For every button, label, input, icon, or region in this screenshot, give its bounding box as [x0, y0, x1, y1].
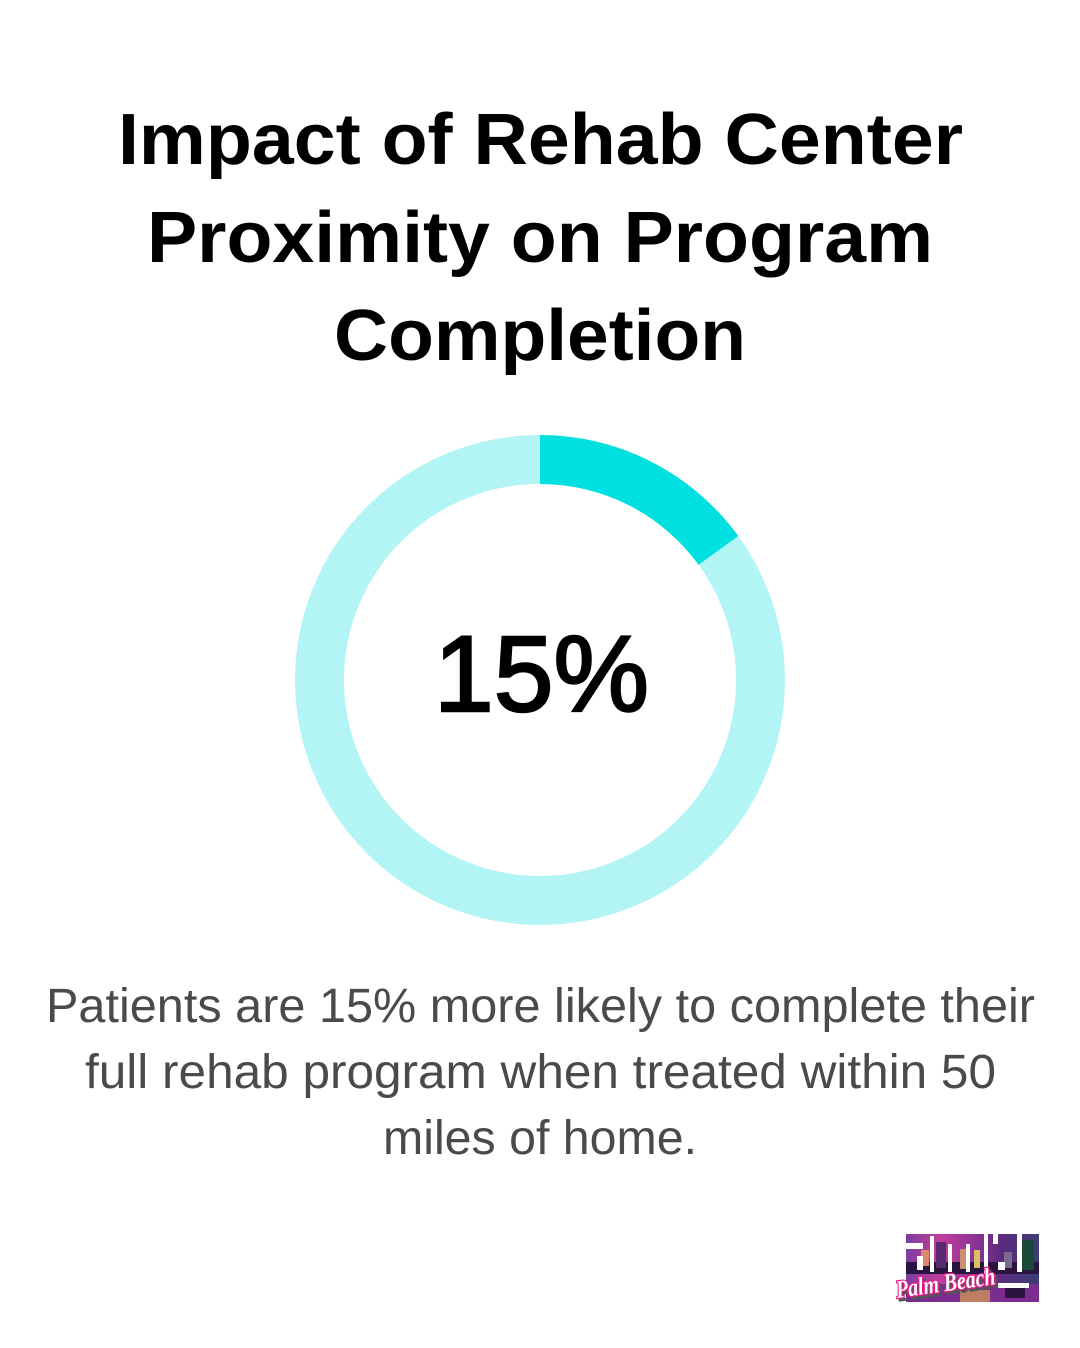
title: Completion [334, 296, 746, 376]
donut highlighted segment [540, 435, 738, 565]
logo script text: Palm Beach [893, 1263, 997, 1304]
donut chart: 15% [320, 435, 760, 900]
donut center value: 15% [434, 613, 649, 734]
logo: Palm Beach [893, 1229, 1039, 1307]
logo script text: Palm Beach [896, 1266, 999, 1307]
logo water reflection [906, 1284, 1039, 1302]
donut track [320, 460, 760, 900]
logo city background [906, 1234, 1039, 1302]
logo letter cut-outs [906, 1229, 1029, 1288]
description text: full rehab program when treated within 50 [85, 1046, 996, 1099]
logo skyline [906, 1240, 1039, 1274]
title: Proximity on Program [147, 198, 933, 278]
description text: miles of home. [383, 1112, 697, 1165]
title [118, 100, 963, 376]
description text [46, 980, 1035, 1165]
description text: Patients are 15% more likely to complete their [46, 980, 1035, 1033]
title: Impact of Rehab Center [118, 100, 963, 180]
